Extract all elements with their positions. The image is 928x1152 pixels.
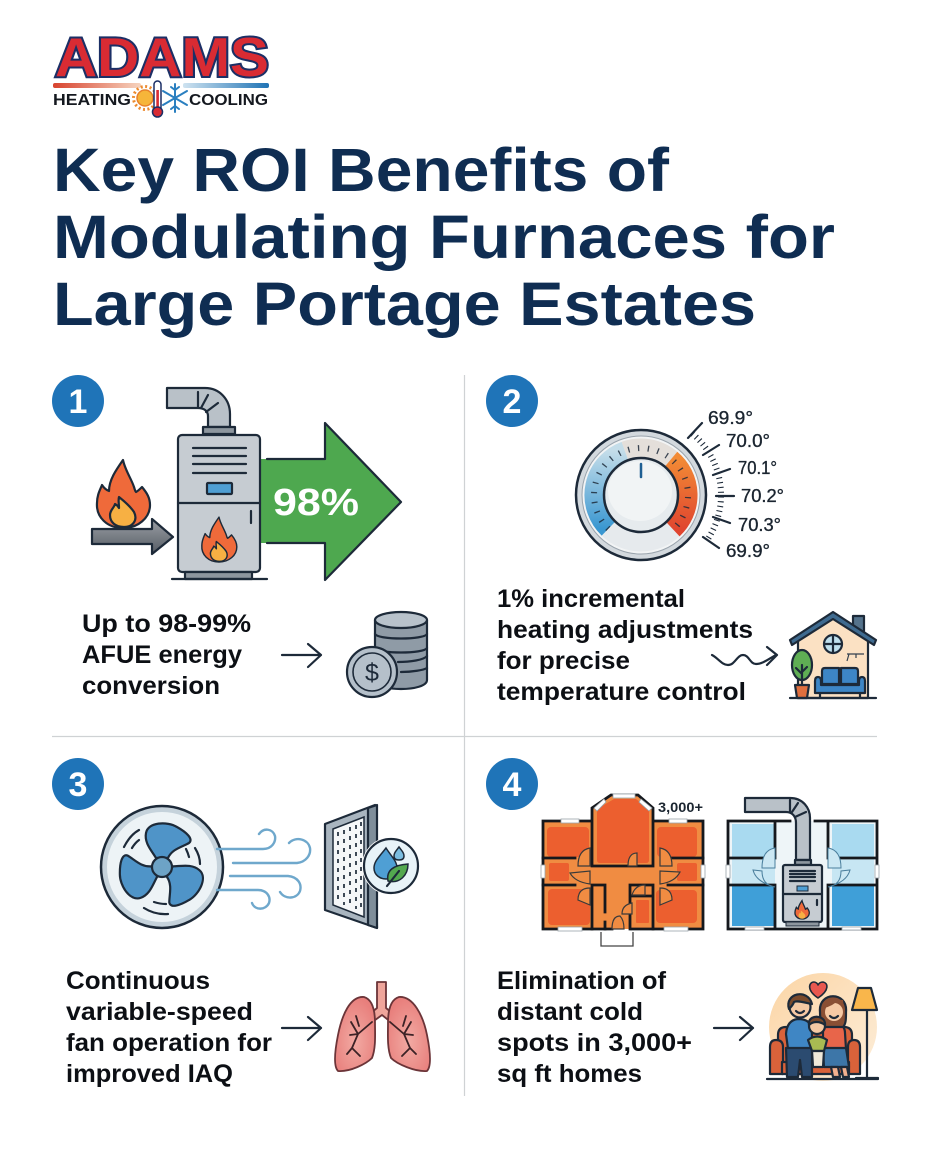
badge 3 — [52, 758, 104, 810]
arrow — [282, 1017, 321, 1040]
scale labels: 70.1° — [738, 458, 777, 478]
text: AFUE: conversion — [82, 672, 220, 700]
logo: Adams Heating & Cooling: COOLING — [189, 92, 268, 109]
icon: coins: $ — [365, 659, 379, 687]
text: IAQ: Continuous — [66, 967, 210, 995]
text: IAQ — [66, 967, 272, 1088]
arrow — [714, 1017, 753, 1040]
icon: high-efficiency arrow — [260, 423, 401, 580]
scale labels: 70.3° — [738, 515, 781, 535]
icon: air filter — [325, 805, 377, 928]
text: AFUE: AFUE energy — [82, 641, 242, 669]
text: incremental: for precise — [497, 647, 630, 675]
text: cold spots: spots in 3,000+ — [497, 1029, 692, 1057]
icon: furnace — [167, 388, 267, 579]
scale labels: 69.9° — [708, 408, 753, 428]
badge 1 — [52, 375, 104, 427]
badge 4 — [486, 758, 538, 810]
text: cold spots — [497, 967, 692, 1088]
text: IAQ: fan operation for — [66, 1029, 272, 1057]
badge 2 — [486, 375, 538, 427]
badge 4: 4 — [503, 766, 522, 804]
scale labels: 70.0° — [726, 431, 770, 451]
icon: coins — [347, 612, 427, 697]
badge 3: 3 — [69, 766, 87, 804]
title: Key ROI Benefits of — [53, 136, 670, 204]
logo: Adams Heating & Cooling: HEATING — [53, 92, 131, 109]
scale labels: 70.2° — [741, 486, 784, 506]
icon: house — [790, 612, 876, 698]
title: Modulating Furnaces for — [53, 203, 835, 271]
icon: heated floor plan — [541, 794, 705, 946]
text: IAQ: improved IAQ — [66, 1060, 233, 1088]
label: 3,000+: 3,000+ — [658, 800, 703, 815]
text: incremental: heating adjustments — [497, 616, 753, 644]
panel 4: cold-spot elimination — [486, 758, 879, 1088]
text: incremental: 1% incremental — [497, 585, 685, 613]
text: cold spots: sq ft homes — [497, 1060, 642, 1088]
text: incremental: temperature control — [497, 678, 746, 706]
logo: Adams Heating & Cooling: ADAMS — [55, 26, 269, 88]
title: Large Portage Estates — [53, 270, 756, 338]
panel 2: incremental adjustments — [486, 375, 876, 706]
text: incremental — [497, 585, 753, 706]
scale labels — [708, 408, 784, 561]
icon: clean air badge — [362, 837, 420, 895]
text: AFUE: Up to 98-99% — [82, 610, 251, 638]
text: cold spots: Elimination of — [497, 967, 667, 995]
icon: input flame and arrow — [92, 460, 173, 554]
scale labels: 69.9° — [726, 541, 770, 561]
icon: wind lines — [217, 830, 310, 909]
logo: Adams Heating & Cooling — [53, 26, 269, 117]
icon: fine scale ticks — [688, 423, 734, 548]
icon: fan — [101, 806, 223, 928]
panel 1: AFUE energy conversion — [52, 375, 427, 700]
badge 2: 2 — [503, 383, 521, 421]
icon: cooled floor plan — [726, 798, 879, 930]
text: AFUE — [82, 610, 251, 700]
text: cold spots: distant cold — [497, 998, 643, 1026]
arrow — [282, 644, 321, 667]
icon: lungs — [335, 982, 430, 1071]
arrow: wavy — [712, 647, 777, 665]
title — [53, 136, 835, 338]
icon: family on sofa — [767, 973, 878, 1081]
panel 3: variable-speed fan — [52, 758, 430, 1088]
icon: high-efficiency arrow: 98% — [273, 482, 359, 524]
icon: thermostat dial — [576, 430, 706, 560]
text: IAQ: variable-speed — [66, 998, 253, 1026]
badge 1: 1 — [69, 383, 87, 421]
